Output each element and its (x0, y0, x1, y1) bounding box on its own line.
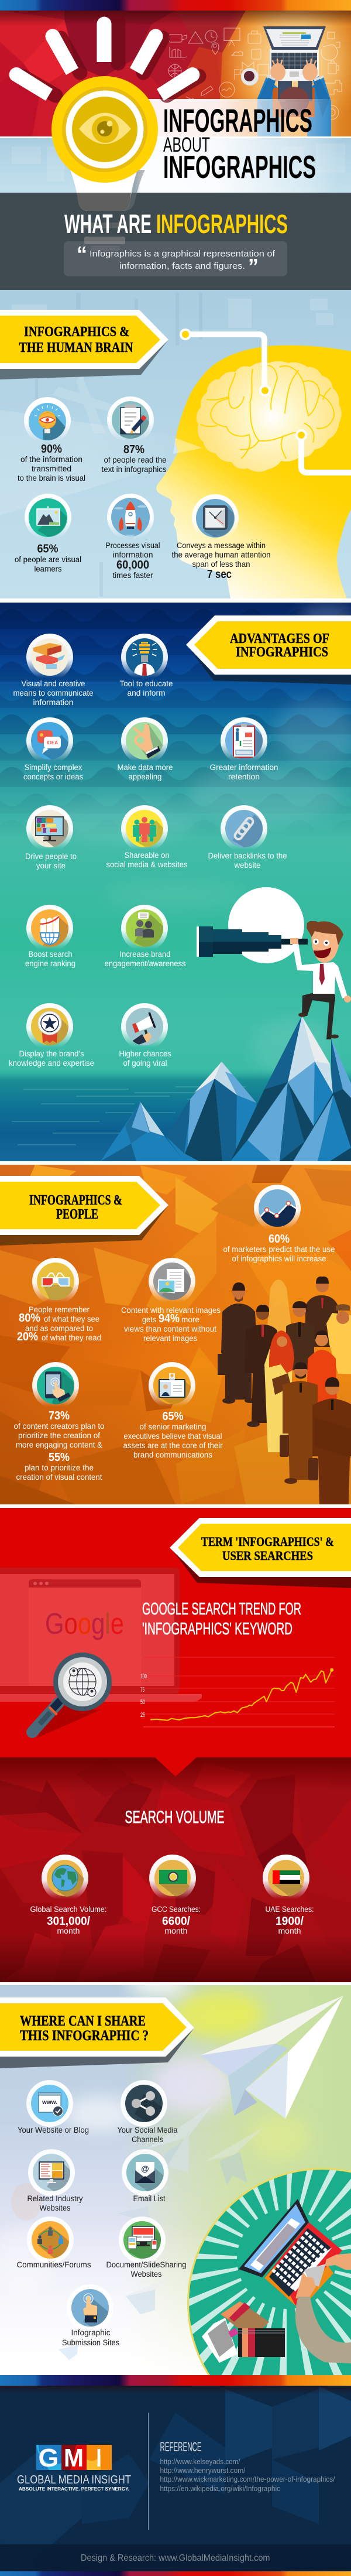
references list: REFERENCE (160, 2440, 201, 2454)
banner: infographics and people (0, 1176, 168, 1246)
logo: global media insight: I (96, 2444, 102, 2472)
advantage: visual and creative: means to communicate (13, 689, 94, 697)
advantage: deliver backlinks: Deliver backlinks to the (208, 851, 287, 860)
advantage: shareable on social media: Shareable on (124, 851, 170, 860)
callout pointer (155, 1757, 197, 1776)
share option: your website or blog: www. (42, 2099, 57, 2106)
advantage: drive people to your site: Drive people to (25, 852, 77, 861)
light bulb rays (9, 16, 199, 101)
stat: 65 percent senior marketing executives: of senior marketing (139, 1422, 206, 1431)
stat: conveys a message in 7 seconds: the average human attention (172, 550, 270, 559)
logo: global media insight: GLOBAL MEDIA INSIGHT (17, 2474, 131, 2486)
banner: advantages of infographics: ADVANTAGES OF (230, 631, 329, 646)
line chart: search trend: 100 (140, 1673, 147, 1680)
stat: content with images gets 94 percent: views than content without (124, 1325, 216, 1333)
illustration: faded laptop with Google page: Google (45, 1607, 124, 1640)
advantage: make data more appealing: appealing (129, 772, 161, 781)
banner: term infographics and user searches: USER SEARCHES (222, 1548, 313, 1563)
icon cluster: faint white outlined marketing doodles (168, 28, 342, 119)
advantage: greater information retention (209, 717, 278, 781)
stat: people remember 80 percent: 80% (19, 1312, 40, 1325)
advantage: simplify complex concepts: concepts or ideas (23, 772, 83, 781)
advantage: display brand knowledge (9, 1003, 94, 1068)
stat: processes 60000 times faster: 60,000 (116, 559, 149, 572)
banner: infographics and people: PEOPLE (56, 1207, 98, 1222)
line chart: search trend: 75 (140, 1686, 144, 1694)
banner: infographics and people: INFOGRAPHICS & (29, 1193, 122, 1208)
stat: 60 percent of marketers: 60% (269, 1233, 290, 1246)
share option: email list: @ (141, 2164, 149, 2173)
stat: 90 percent visual: to the brain is visual (18, 474, 85, 483)
stat: content with images gets 94 percent: relevant images (143, 1334, 197, 1343)
stat: 73 percent and 55 percent content creators: more engaging content & (16, 1441, 102, 1449)
banner: advantages of infographics: INFOGRAPHICS (236, 645, 328, 660)
stat: 73 percent and 55 percent content creators: of content creators plan to (14, 1422, 104, 1431)
header panel: red and orange polygon background (0, 0, 351, 138)
share option: social media channels: Channels (132, 2135, 163, 2144)
share option: communities and forums: Communities/Forums (16, 2260, 91, 2269)
references list: http://www.wickmarketing.com/the-power-of-infographics/ (160, 2475, 335, 2483)
advantage: drive people to your site: your site (36, 861, 66, 870)
stat: 90 percent visual: transmitted (32, 464, 71, 473)
stat: GCC searches: GCC Searches: (152, 1905, 201, 1914)
illustration: man with telescope (197, 921, 351, 1039)
stat: conveys a message in 7 seconds (172, 494, 270, 581)
light bulb with eye (51, 76, 158, 251)
icon: magnifying glass with globe (32, 1653, 112, 1738)
illustration: low-poly mountains (101, 1016, 351, 1161)
stat: 65 percent senior marketing executives: assets are at the core of their (123, 1441, 223, 1450)
stat: 73 percent and 55 percent content creators: plan to prioritize the (25, 1463, 94, 1472)
panel: infographics and people background (0, 1165, 351, 1504)
panel: search volume low-poly background (0, 1757, 351, 1982)
share option: infographic submission sites: Infographic (71, 2328, 111, 2337)
advantage: shareable on social media: social media & websites (106, 860, 188, 869)
banner: where can I share this infographic (0, 1997, 194, 2068)
definition quote box: Infographics is a graphical representation of (90, 249, 276, 259)
title band: white fade behind headline (135, 99, 339, 193)
advantage: shareable on social media (106, 805, 188, 869)
advantage: boost search engine ranking: engine ranking (25, 959, 75, 968)
stat: 87 percent read text (102, 396, 167, 474)
advantage: higher chances of going viral (119, 1003, 171, 1068)
stat: GCC searches: month (165, 1927, 187, 1935)
share option: your website or blog: Your Website or Blog (18, 2126, 89, 2134)
stat: 90 percent visual (18, 397, 85, 483)
references list: https://en.wikipedia.org/wiki/Infographic (160, 2485, 280, 2493)
stat: conveys a message in 7 seconds: 7 sec (207, 568, 232, 581)
advantage: tool to educate: Tool to educate (119, 679, 173, 688)
share option: document and slide sharing websites: Websites (131, 2270, 162, 2279)
advantage: deliver backlinks (208, 805, 287, 870)
advantage: increase brand engagement: Increase brand (119, 950, 171, 959)
share option: email list: Email List (133, 2194, 166, 2203)
headline: infographics about infographics: ABOUT (163, 134, 210, 156)
stat: people remember 80 percent: and as compared to (25, 1324, 93, 1333)
share option: document and slide sharing websites (106, 2216, 186, 2279)
share option: email list (122, 2149, 168, 2201)
stat: 60 percent of marketers: of marketers predict that the use (223, 1245, 335, 1254)
stat: 65 percent visual learners (15, 494, 81, 573)
logo: global media insight: G (39, 2444, 58, 2472)
stat: GCC searches (149, 1855, 202, 1935)
stat: 73 percent and 55 percent content creators: creation of visual content (16, 1473, 102, 1482)
stat: UAE searches (263, 1855, 315, 1935)
advantage: boost search engine ranking (25, 905, 79, 968)
illustration: laptop on green sunburst circle (187, 2168, 351, 2375)
stat: people remember 80 percent: 20% (17, 1330, 38, 1343)
stat: conveys a message in 7 seconds: Conveys a message within (177, 541, 266, 550)
definition quote box (64, 241, 287, 278)
advantage: display brand knowledge: Display the brand's (19, 1049, 84, 1058)
share option: related industry websites: Related Industry (27, 2194, 83, 2203)
share option: social media channels (117, 2080, 178, 2144)
stat: content with images gets 94 percent: Content with relevant images (121, 1306, 221, 1315)
stat: people remember 80 percent: People remember (29, 1305, 90, 1314)
stat: 73 percent and 55 percent content creators: 55% (49, 1451, 70, 1464)
stat: 65 percent senior marketing executives: executives believe that visual (124, 1432, 222, 1441)
footer credit line: Design & Research: www.GlobalMediaInsight.com (81, 2553, 270, 2563)
stat: global search volume: month (57, 1927, 80, 1935)
stat: GCC searches: 6600/ (162, 1915, 190, 1928)
stat: 65 percent senior marketing executives: brand communications (133, 1451, 212, 1459)
advantage: deliver backlinks: website (234, 861, 261, 870)
stat: global search volume (30, 1855, 106, 1935)
advantage: make data more appealing: Make data more (117, 763, 173, 772)
stat: content with images gets 94 percent: gets (142, 1315, 156, 1324)
advantage: greater information retention: Greater information (209, 763, 278, 772)
stat: 73 percent and 55 percent content creators (14, 1362, 104, 1482)
line chart: search trend (140, 1657, 335, 1727)
stat: people remember 80 percent: of what they see (44, 1315, 99, 1323)
stat: UAE searches: 1900/ (276, 1915, 304, 1928)
light blue band behind title (0, 136, 351, 193)
stat: 65 percent senior marketing executives: 65% (163, 1410, 184, 1423)
stat: 90 percent visual: of the information (20, 455, 82, 464)
illustration: faded laptop with Google page (0, 1568, 202, 1702)
stat: 60 percent of marketers (223, 1185, 335, 1263)
advantage: make data more appealing (117, 717, 173, 781)
advantage: visual and creative: Visual and creative (21, 679, 85, 688)
advantage: increase brand engagement: engagement/awareness (104, 959, 186, 968)
heading: search volume: SEARCH VOLUME (125, 1808, 225, 1827)
stat: 87 percent read text: of people read the (104, 456, 166, 464)
banner: where can I share this infographic: WHERE CAN I SHARE (20, 2013, 146, 2029)
illustration: white moon (228, 887, 304, 963)
banner: advantages of infographics (186, 615, 351, 685)
heading: what are infographics: WHAT ARE (64, 209, 152, 239)
panel: footer background (0, 2386, 351, 2576)
stat: 65 percent visual learners: learners (34, 565, 62, 573)
top colour bar (0, 0, 351, 11)
heading: what are infographics (64, 209, 288, 239)
advantage: increase brand engagement (104, 905, 186, 968)
advantage: simplify complex concepts (23, 717, 83, 781)
references list: http://www.kelseyads.com/ (160, 2458, 240, 2466)
advantage: drive people to your site (25, 805, 80, 870)
stat: conveys a message in 7 seconds: span of less than (192, 560, 250, 569)
advantage: greater information retention: retention (228, 772, 260, 781)
stat: processes 60000 times faster: times faster (112, 571, 153, 580)
section divider (0, 1161, 351, 1165)
section divider (0, 598, 351, 603)
share option: your website or blog (18, 2080, 89, 2134)
share option: infographic submission sites: Submission Sites (62, 2338, 119, 2347)
definition quote box: “ (77, 242, 87, 266)
stat: people remember 80 percent: of what they read (42, 1333, 101, 1342)
advantage: higher chances of going viral: Higher chances (119, 1049, 171, 1058)
banner: infographics and the human brain: THE HUMAN BRAIN (19, 340, 133, 355)
section divider (0, 1504, 351, 1508)
advantage: higher chances of going viral: of going viral (123, 1059, 167, 1068)
panel: advantages of infographics background (0, 603, 351, 1161)
advantage: visual and creative (13, 634, 94, 707)
stat: UAE searches: UAE Searches: (266, 1905, 314, 1914)
banner: infographics and the human brain (0, 310, 168, 379)
headline: infographics about infographics (163, 102, 316, 185)
stat: global search volume: Global Search Volume: (30, 1905, 106, 1914)
advantage: tool to educate (119, 634, 173, 697)
panel: term infographics and user searches background (0, 1508, 351, 1757)
share option: document and slide sharing websites: Document/SlideSharing (106, 2260, 186, 2269)
advantage: tool to educate: and inform (128, 689, 165, 697)
banner: infographics and the human brain: INFOGRAPHICS & (24, 324, 129, 340)
definition quote box: ” (248, 254, 259, 278)
illustration: person typing at a laptop, top view (241, 26, 331, 136)
stat: 60 percent of marketers: of infographics will increase (232, 1254, 326, 1263)
stat: 90 percent visual: 90% (41, 443, 62, 456)
panel: where can I share background (0, 1968, 351, 2375)
references list (160, 2440, 335, 2493)
share option: social media channels: Your Social Media (117, 2126, 178, 2134)
references list: http://www.henrywurst.com/ (160, 2466, 246, 2475)
stat: 65 percent visual learners: of people are visual (15, 555, 81, 564)
dark panel: what are infographics (0, 193, 351, 290)
section divider (0, 1982, 351, 1985)
logo: global media insight: ABSOLUTE INTERACTIVE. PERFECT SYNERGY. (19, 2486, 129, 2492)
stat: processes 60000 times faster: information (112, 550, 153, 559)
logo: global media insight: M (64, 2444, 84, 2472)
stat: content with images gets 94 percent (121, 1258, 221, 1343)
line chart: search trend: 50 (140, 1699, 145, 1706)
share option: communities and forums (16, 2216, 91, 2269)
advantage: simplify complex concepts: IDEA (47, 740, 58, 745)
stat: processes 60000 times faster (105, 494, 160, 580)
stat: people remember 80 percent (17, 1258, 101, 1343)
advantage: visual and creative: information (33, 698, 74, 707)
definition quote box: information, facts and figures. (119, 261, 245, 271)
head silhouette with brain (156, 329, 351, 598)
share option: related industry websites: Websites (40, 2204, 71, 2212)
stat: UAE searches: month (278, 1927, 301, 1935)
stat: content with images gets 94 percent: 94% (159, 1312, 180, 1325)
stat: 73 percent and 55 percent content creators: prioritize the creation of (18, 1431, 100, 1440)
illustration: paper planes (58, 1996, 343, 2360)
stat: content with images gets 94 percent: more (181, 1315, 199, 1324)
share option: infographic submission sites (62, 2284, 119, 2347)
banner: where can I share this infographic: THIS INFOGRAPHIC ? (20, 2028, 149, 2044)
advantage: display brand knowledge: knowledge and expertise (9, 1059, 94, 1068)
advantage: simplify complex concepts: Simplify complex (25, 763, 82, 772)
illustration: crowd of business people (218, 1277, 351, 1504)
panel: infographics and the human brain background (0, 290, 351, 598)
banner: term infographics and user searches (170, 1518, 351, 1588)
stat: global search volume: 301,000/ (47, 1915, 90, 1928)
footer divider (148, 2413, 149, 2530)
line chart: search trend: 25 (140, 1712, 145, 1719)
logo: global media insight (17, 2444, 131, 2492)
stat: 73 percent and 55 percent content creators: 73% (49, 1410, 70, 1422)
stat: 65 percent senior marketing executives (123, 1362, 223, 1459)
stat: 87 percent read text: 87% (123, 443, 144, 456)
share option: related industry websites (27, 2149, 83, 2212)
stat: 87 percent read text: text in infographics (102, 465, 167, 474)
bottom colour bar (0, 2571, 351, 2576)
footer colour bar (0, 2375, 351, 2386)
stat: processes 60000 times faster: Processes visual (105, 541, 160, 550)
stat: 65 percent visual learners: 65% (37, 542, 58, 555)
advantage: boost search engine ranking: Boost search (28, 950, 73, 959)
heading: google search trend (142, 1600, 301, 1638)
